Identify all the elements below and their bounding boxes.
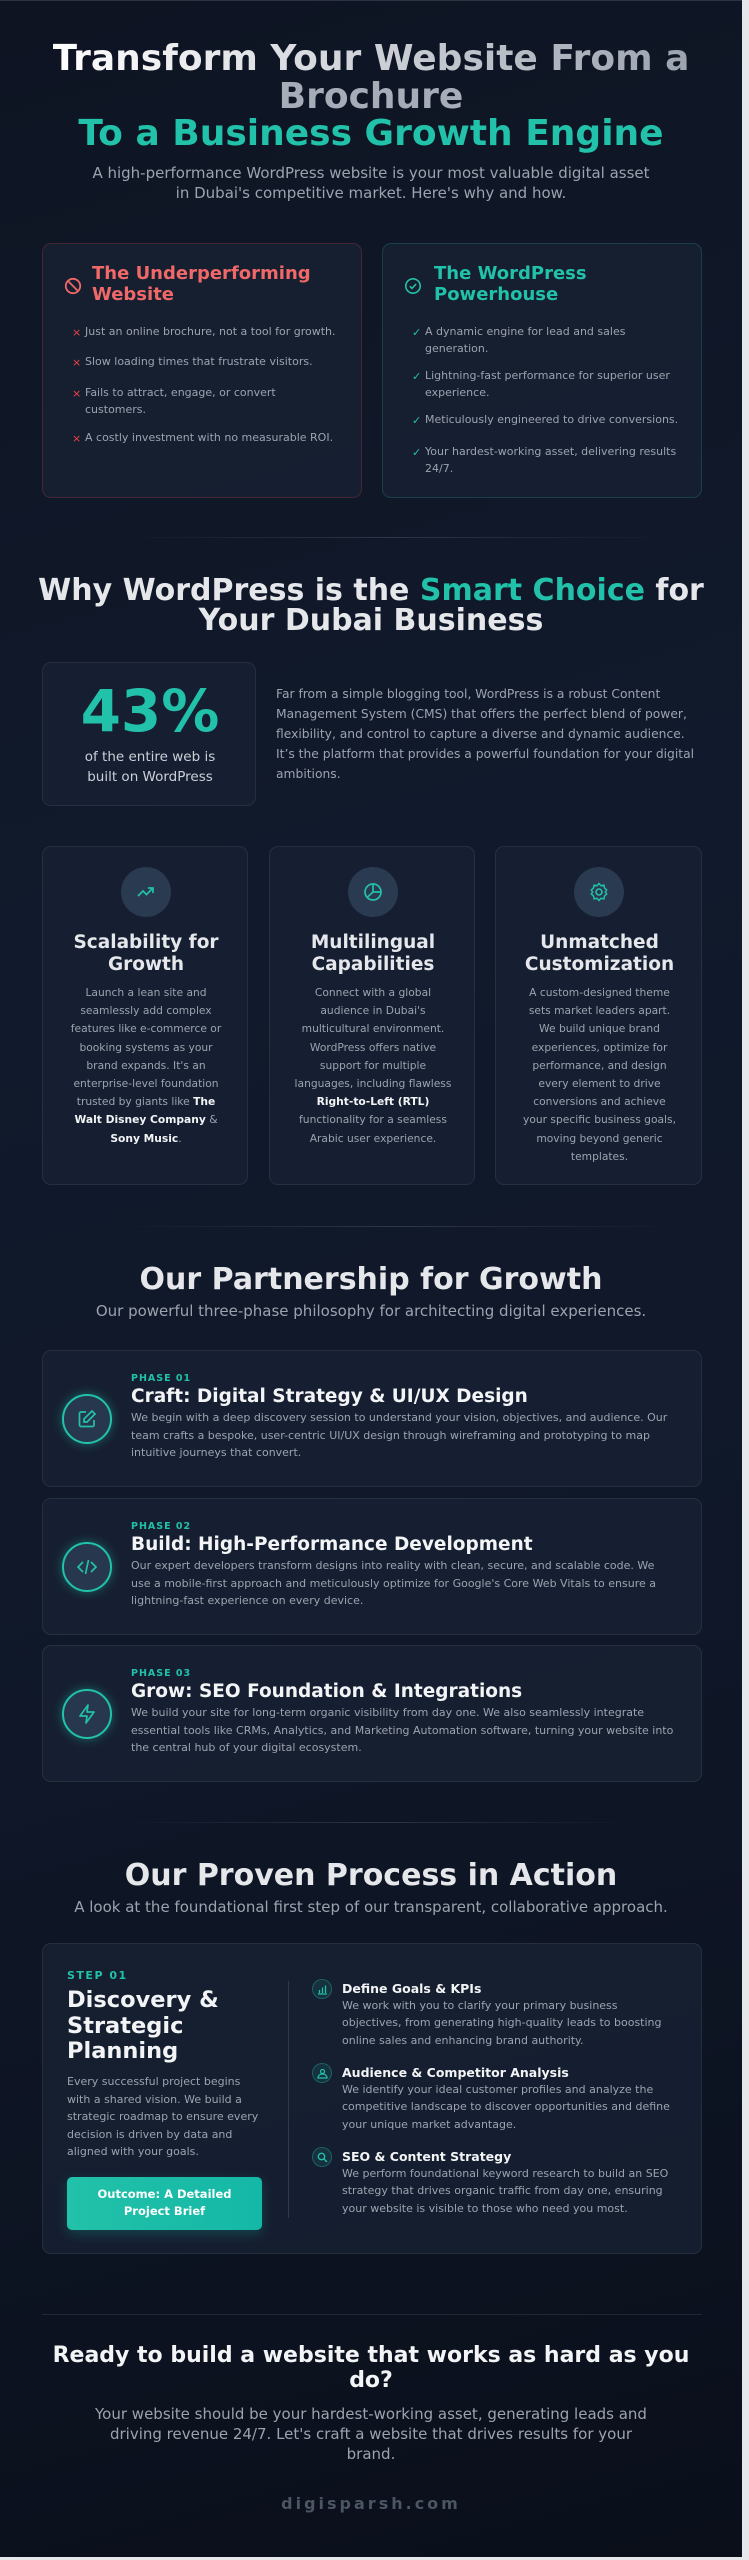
text block: wordpress description: It’s the platform that provides a powerful foundation for your digital xyxy=(276,747,694,761)
panel: scalability: trusted by giants like The xyxy=(77,1095,215,1108)
panel: multilingual: functionality for a seamless xyxy=(299,1113,447,1126)
list: benefits: generation. xyxy=(425,342,488,355)
list: benefits: Your hardest-working asset, delivering results xyxy=(425,445,676,458)
item: seo strategy xyxy=(312,2147,668,2215)
text: call to action: brand. xyxy=(347,2445,395,2463)
panel: multilingual: Right-to-Left (RTL) xyxy=(317,1095,429,1108)
step title xyxy=(67,1987,219,2064)
subtitle: process: A look at the foundational first step of our transparent, collaborative approach. xyxy=(74,1898,668,1916)
list: problems: customers. xyxy=(85,403,146,416)
item: define goals: Define Goals & KPIs xyxy=(342,1981,481,1996)
panel: customization: We build unique brand xyxy=(539,1022,660,1035)
panel: phase 01 xyxy=(42,1350,702,1487)
button: outcome: Outcome: A Detailed xyxy=(98,2187,232,2201)
panel: scalability: brand expands. It's an xyxy=(86,1059,206,1072)
list: problems: Just an online brochure, not a tool for growth. xyxy=(85,325,336,338)
step title: Discovery & xyxy=(67,1987,219,2013)
text: call to action: Your website should be your hardest-working asset, generating leads and xyxy=(95,2405,647,2423)
panel: multilingual: Capabilities xyxy=(312,954,434,975)
list: problems: A costly investment with no measurable ROI. xyxy=(85,431,333,444)
text block: wordpress description: Management System (CMS) that offers the perfect blend of power, xyxy=(276,707,687,721)
panel: customization: every element to drive xyxy=(538,1077,661,1090)
heading: why wordpress: Your Dubai Business xyxy=(199,603,543,638)
button: outcome xyxy=(67,2177,262,2230)
heading: process: Our Proven Process in Action xyxy=(125,1858,617,1893)
item: define goals: online sales and enhancing brand authority. xyxy=(342,2034,584,2047)
button: outcome: Project Brief xyxy=(124,2204,205,2218)
panel: scalability: features like e-commerce or xyxy=(71,1022,221,1035)
panel: wordpress powerhouse: ✓ xyxy=(412,326,421,339)
text: call to action: driving revenue 24/7. Let's craft a website that drives results for your xyxy=(110,2425,632,2443)
panel: scalability: Launch a lean site and xyxy=(85,986,207,999)
heading: The WordPress xyxy=(434,263,587,284)
step description: Every successful project begins xyxy=(67,2075,240,2088)
panel: customization: Unmatched xyxy=(540,932,659,953)
item: audience analysis xyxy=(312,2063,670,2131)
item: seo strategy: your website is visible to those who need you most. xyxy=(342,2202,628,2215)
item: audience analysis: We identify your ideal customer profiles and analyze the xyxy=(342,2083,653,2096)
panel: customization: moving beyond generic xyxy=(536,1132,663,1145)
list: problems xyxy=(72,325,336,445)
stat box: 43%: built on WordPress xyxy=(87,769,213,785)
icon: bar chart xyxy=(312,1979,332,1999)
panel: customization xyxy=(495,846,702,1185)
panel: phase 03: Grow: SEO Foundation & Integrations xyxy=(131,1681,522,1702)
panel: scalability: Scalability for xyxy=(73,932,219,953)
subtitle: A high-performance WordPress website is your most valuable digital asset xyxy=(92,164,650,182)
heading: why wordpress: Why WordPress is the Smart Choice for xyxy=(38,573,704,608)
panel: underperforming website: × xyxy=(72,326,81,339)
item: define goals: We work with you to clarify your primary business xyxy=(342,1999,618,2012)
stat box: 43%: of the entire web is xyxy=(85,749,215,765)
panel: customization: templates. xyxy=(571,1150,628,1163)
panel: multilingual: Connect with a global xyxy=(315,986,431,999)
text block: wordpress description: flexibility, and control to capture a diverse and dynamic audience. xyxy=(276,727,685,741)
heading: call to action: Ready to build a website that works as hard as you xyxy=(53,2343,689,2368)
list: problems: Slow loading times that frustrate visitors. xyxy=(85,355,313,368)
list: benefits: A dynamic engine for lead and sales xyxy=(425,325,625,338)
heading xyxy=(92,263,311,305)
panel: scalability: seamlessly add complex xyxy=(80,1004,212,1017)
panel: phase 03: PHASE 03 xyxy=(131,1668,191,1679)
list: benefits: experience. xyxy=(425,386,489,399)
item: define goals xyxy=(312,1979,662,2047)
panel: phase 01: team crafts a bespoke, user-centric UI/UX design through wireframing and prototyping to map xyxy=(131,1428,650,1442)
panel: multilingual: support for multiple xyxy=(320,1059,426,1072)
subtitle: in Dubai's competitive market. Here's why and how. xyxy=(176,184,566,202)
list: benefits: 24/7. xyxy=(425,462,453,475)
list: benefits: Lightning-fast performance for superior user xyxy=(425,369,670,382)
panel: phase 02: Build: High-Performance Development xyxy=(131,1534,533,1555)
step description: with a shared vision. We build a xyxy=(67,2092,242,2106)
panel: phase 01: PHASE 01 xyxy=(131,1373,191,1384)
heading: why wordpress xyxy=(38,573,704,638)
footer: brand: digisparsh.com xyxy=(281,2494,461,2513)
icon: lightning xyxy=(62,1689,112,1739)
panel: customization: your specific business goals, xyxy=(523,1113,676,1126)
panel: underperforming website xyxy=(42,243,362,498)
item: audience analysis: Audience & Competitor Analysis xyxy=(342,2065,569,2080)
heading: call to action xyxy=(53,2343,689,2393)
icon: code xyxy=(62,1542,112,1592)
panel: phase 02 xyxy=(42,1498,702,1635)
panel: phase 03 xyxy=(42,1645,702,1782)
panel: customization: sets market leaders apart. xyxy=(529,1004,670,1017)
panel: multilingual: WordPress offers native xyxy=(310,1041,436,1054)
panel: phase 01: Craft: Digital Strategy & UI/UX Design xyxy=(131,1386,528,1407)
panel: customization: performance, and design xyxy=(532,1059,667,1072)
panel: phase 02: use a mobile-first approach and meticulously optimize for Google's Core Web Vitals to ensure a xyxy=(131,1576,656,1590)
panel: customization: conversions and achieve xyxy=(533,1095,666,1108)
icon: search xyxy=(312,2147,332,2167)
panel: scalability: Growth xyxy=(108,954,184,975)
item: seo strategy: We perform foundational keyword research to build an SEO xyxy=(342,2167,668,2180)
heading: partnership: Our Partnership for Growth xyxy=(140,1262,602,1297)
panel: underperforming website: × xyxy=(72,356,81,369)
subtitle xyxy=(92,164,650,202)
icon: gear xyxy=(574,867,624,917)
stat box: 43% xyxy=(42,662,256,806)
panel: phase 03: the central hub of your digital ecosystem. xyxy=(131,1741,362,1754)
item: define goals: objectives, from generating high-quality leads to boosting xyxy=(342,2016,662,2029)
list: problems: Fails to attract, engage, or convert xyxy=(85,386,276,399)
panel: scalability: booking systems as your xyxy=(79,1041,213,1054)
subtitle: partnership: Our powerful three-phase philosophy for architecting digital experiences. xyxy=(96,1302,646,1320)
step description: aligned with your goals. xyxy=(67,2145,199,2158)
panel: wordpress powerhouse: ✓ xyxy=(412,446,421,459)
step title: Planning xyxy=(67,2038,178,2064)
panel: multilingual: multicultural environment. xyxy=(302,1022,444,1035)
panel: phase 02: Our expert developers transform designs into reality with clean, secure, and scalable code. We xyxy=(131,1559,654,1572)
icon: users xyxy=(312,2063,332,2083)
panel: multilingual: Arabic user experience. xyxy=(310,1132,436,1145)
panel: wordpress powerhouse xyxy=(382,243,702,498)
panel: phase 02: PHASE 02 xyxy=(131,1521,191,1532)
step description: decision is driven by data and xyxy=(67,2128,232,2140)
panel: multilingual xyxy=(269,846,475,1185)
step title: Strategic xyxy=(67,2012,183,2038)
title: Brochure xyxy=(279,76,463,116)
panel: multilingual: Multilingual xyxy=(311,932,435,953)
panel: step 01 xyxy=(42,1943,702,2254)
panel: scalability: enterprise-level foundation xyxy=(73,1077,219,1090)
heading: Powerhouse xyxy=(434,284,558,305)
icon: pie chart xyxy=(348,867,398,917)
heading xyxy=(434,263,587,305)
icon: edit xyxy=(62,1394,112,1444)
panel: phase 03: We build your site for long-term organic visibility from day one. We also seamlessly integrate xyxy=(131,1706,644,1719)
item: seo strategy: SEO & Content Strategy xyxy=(342,2149,511,2164)
panel: customization: experiences, optimize for xyxy=(532,1041,667,1054)
heading: call to action: do? xyxy=(349,2368,393,2393)
panel: customization: A custom-designed theme xyxy=(529,986,670,999)
panel: multilingual: audience in Dubai's xyxy=(320,1004,426,1017)
item: audience analysis: competitive landscape to discover opportunities and define xyxy=(342,2100,670,2113)
panel: multilingual: languages, including flawless xyxy=(295,1077,451,1090)
heading: The Underperforming xyxy=(92,263,311,284)
icon: prohibited xyxy=(64,278,82,294)
step label: STEP 01 xyxy=(67,1969,128,1982)
panel: phase 03: essential tools like CRMs, Analytics, and Marketing Automation software, turning your website into xyxy=(131,1724,673,1736)
step description: strategic roadmap to ensure every xyxy=(67,2110,258,2123)
text block: wordpress description: Far from a simple blogging tool, WordPress is a robust Content xyxy=(276,687,660,701)
stat box: 43%: 43% xyxy=(81,677,219,745)
panel: scalability: Sony Music. xyxy=(110,1132,182,1145)
panel: phase 01: intuitive journeys that convert. xyxy=(131,1446,301,1459)
list: benefits: Meticulously engineered to drive conversions. xyxy=(425,413,678,426)
title: Transform Your Website From a xyxy=(53,38,689,79)
panel: scalability xyxy=(42,846,248,1185)
panel: underperforming website: × xyxy=(72,432,81,445)
icon: trending up xyxy=(121,867,171,917)
text: call to action xyxy=(95,2405,647,2463)
item: seo strategy: strategy that drives organic traffic from day one, ensuring xyxy=(342,2184,663,2197)
heading: Website xyxy=(92,284,174,305)
panel: wordpress powerhouse: ✓ xyxy=(412,414,421,427)
panel: wordpress powerhouse: ✓ xyxy=(412,370,421,383)
text block: wordpress description xyxy=(276,687,694,781)
panel: customization: Customization xyxy=(525,954,674,975)
panel: scalability: Walt Disney Company & xyxy=(74,1113,218,1126)
icon: check circle xyxy=(405,278,421,294)
text block: wordpress description: ambitions. xyxy=(276,767,341,781)
panel: underperforming website: × xyxy=(72,387,81,400)
panel: phase 02: lightning-fast experience on every device. xyxy=(131,1594,363,1607)
item: audience analysis: your unique market advantage. xyxy=(342,2118,516,2131)
step description xyxy=(67,2075,258,2158)
title: To a Business Growth Engine xyxy=(78,113,664,154)
panel: phase 01: We begin with a deep discovery session to understand your vision, objectives, and audience. Our xyxy=(131,1411,667,1424)
title xyxy=(53,38,689,154)
list: benefits xyxy=(412,325,678,475)
